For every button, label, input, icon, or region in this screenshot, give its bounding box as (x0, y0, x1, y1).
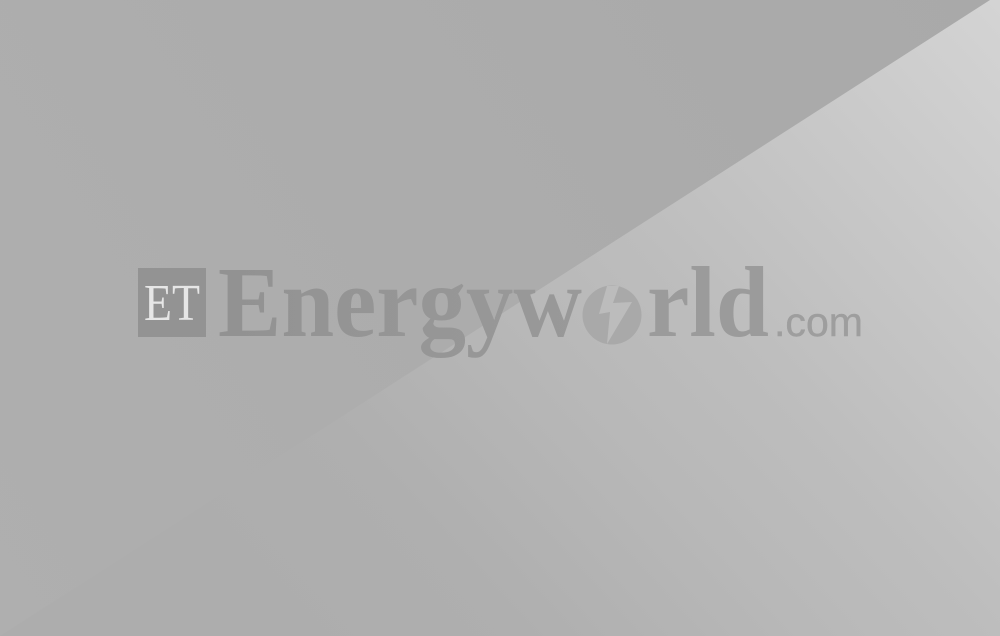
domain suffix: .com: .com (774, 299, 863, 345)
wordmark: Energyw: Energyw (218, 246, 582, 358)
icon: lightning bolt in circle (582, 286, 642, 344)
logo: ETEnergyworld.com (138, 246, 863, 358)
wordmark: rld: rld (647, 246, 769, 358)
logo badge: ET: ET (144, 275, 200, 332)
